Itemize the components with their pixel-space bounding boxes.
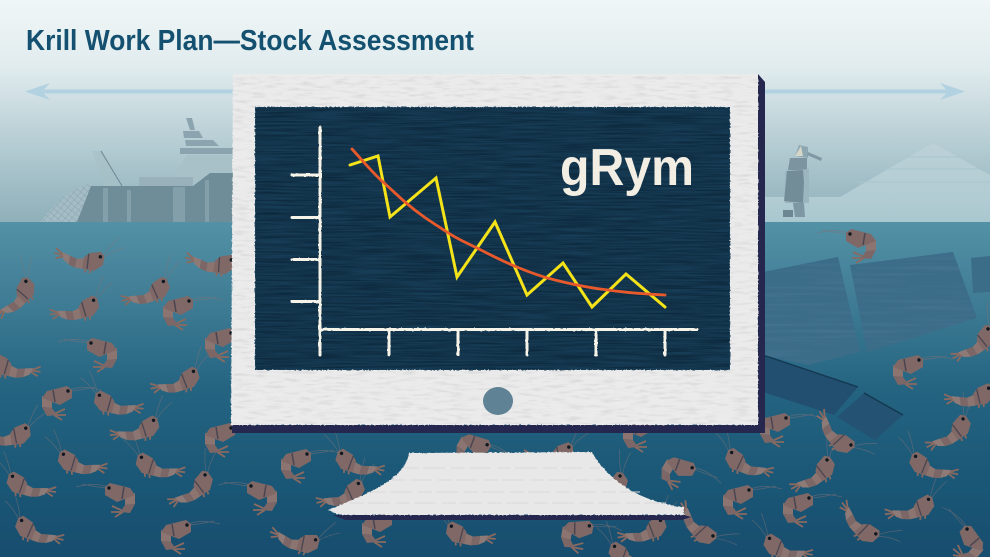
icon: monitor button [483,387,513,415]
icon: iceberg mountain [765,143,990,223]
panel: screen [255,107,730,370]
line chart [292,127,697,355]
icon: penguin [783,145,822,217]
title: Krill Work Plan—Stock Assessment [26,25,474,57]
monitor [231,74,765,433]
panel: submerged ice blocks [763,252,990,440]
background sky [0,0,990,223]
arrow: right [760,83,965,100]
krill swarm [0,227,990,557]
icon: fishing ship [41,118,235,222]
monitor stand [328,452,691,520]
arrow: left [25,83,237,100]
label: gRym: gRym [560,139,694,197]
water [0,222,990,557]
